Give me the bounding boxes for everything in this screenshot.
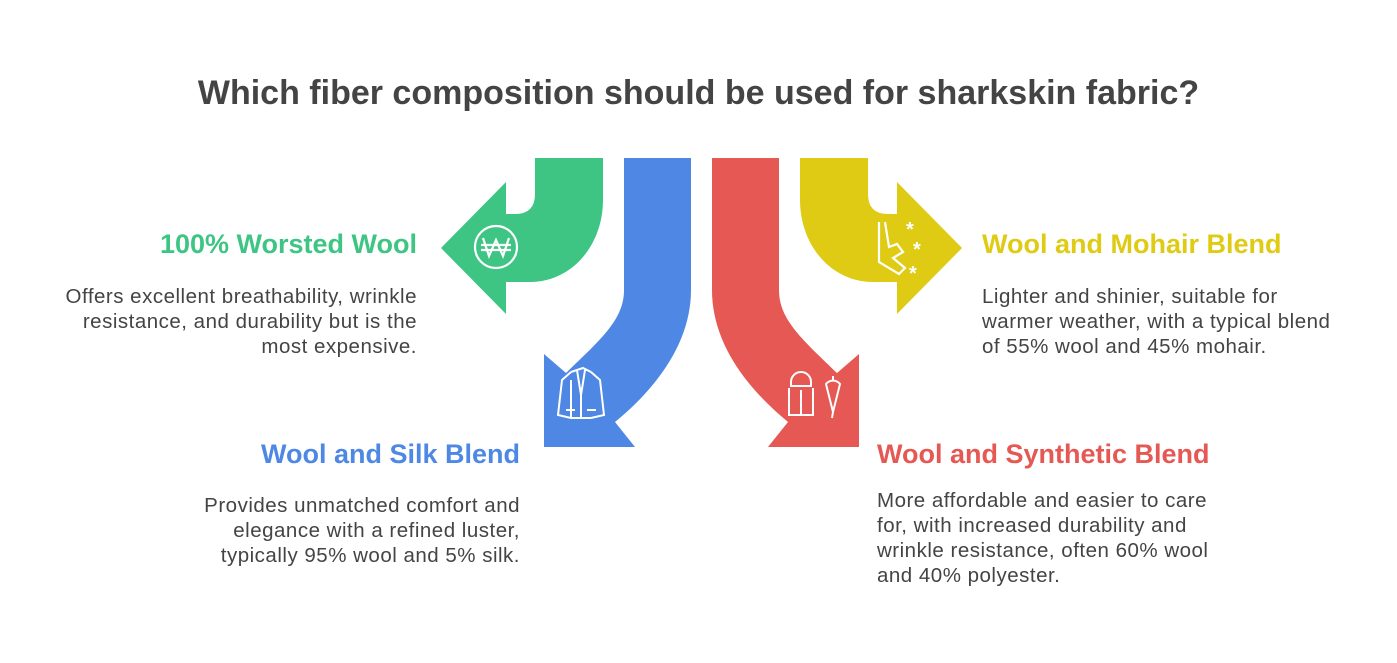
- text block: Wool and Synthetic Blend: Wool and Synthetic Blend: [877, 439, 1210, 469]
- text block: Wool and Mohair Blend: Wool and Mohair Blend: [982, 229, 1282, 259]
- icon: jacket: [558, 368, 604, 418]
- icon: raincoat and umbrella: [789, 372, 840, 418]
- text block: 100% Worsted Wool: 100% Worsted Wool: [160, 229, 417, 259]
- icon: mohair: [879, 219, 921, 285]
- text block: 100% Worsted Wool: most expensive.: [261, 335, 417, 358]
- arrow: yellow: [800, 158, 962, 314]
- text block: 100% Worsted Wool: resistance, and durability but is the: [83, 310, 417, 333]
- text block: Wool and Silk Blend: [204, 439, 520, 567]
- text block: Wool and Silk Blend: Wool and Silk Blend: [261, 439, 520, 469]
- text block: Wool and Synthetic Blend: More affordable and easier to care: [877, 489, 1207, 512]
- text block: Wool and Synthetic Blend: [877, 439, 1210, 587]
- text block: Wool and Synthetic Blend: and 40% polyester.: [877, 564, 1060, 587]
- title: Which fiber composition should be used for sharkskin fabric?: [198, 74, 1199, 112]
- text block: Wool and Synthetic Blend: for, with increased durability and: [877, 514, 1187, 537]
- text block: 100% Worsted Wool: [66, 229, 417, 358]
- text block: Wool and Mohair Blend: warmer weather, with a typical blend: [982, 310, 1330, 333]
- text block: Wool and Mohair Blend: [982, 229, 1330, 358]
- text block: Wool and Silk Blend: typically 95% wool and 5% silk.: [221, 544, 520, 567]
- arrow: red: [712, 158, 859, 447]
- icon: mohair: *: [906, 219, 914, 241]
- icon: mohair: *: [913, 239, 921, 261]
- text block: Wool and Mohair Blend: Lighter and shinier, suitable for: [982, 285, 1278, 308]
- arrow: green: [441, 158, 603, 314]
- icon: mohair: *: [909, 263, 917, 285]
- text block: 100% Worsted Wool: Offers excellent breathability, wrinkle: [66, 285, 417, 308]
- text block: Wool and Synthetic Blend: wrinkle resistance, often 60% wool: [877, 539, 1208, 562]
- text block: Wool and Silk Blend: Provides unmatched comfort and: [204, 494, 520, 517]
- icon: wool coin: [475, 226, 517, 268]
- text block: Wool and Silk Blend: elegance with a refined luster,: [233, 519, 520, 542]
- arrow: blue: [544, 158, 691, 447]
- text block: Wool and Mohair Blend: of 55% wool and 45% mohair.: [982, 335, 1267, 358]
